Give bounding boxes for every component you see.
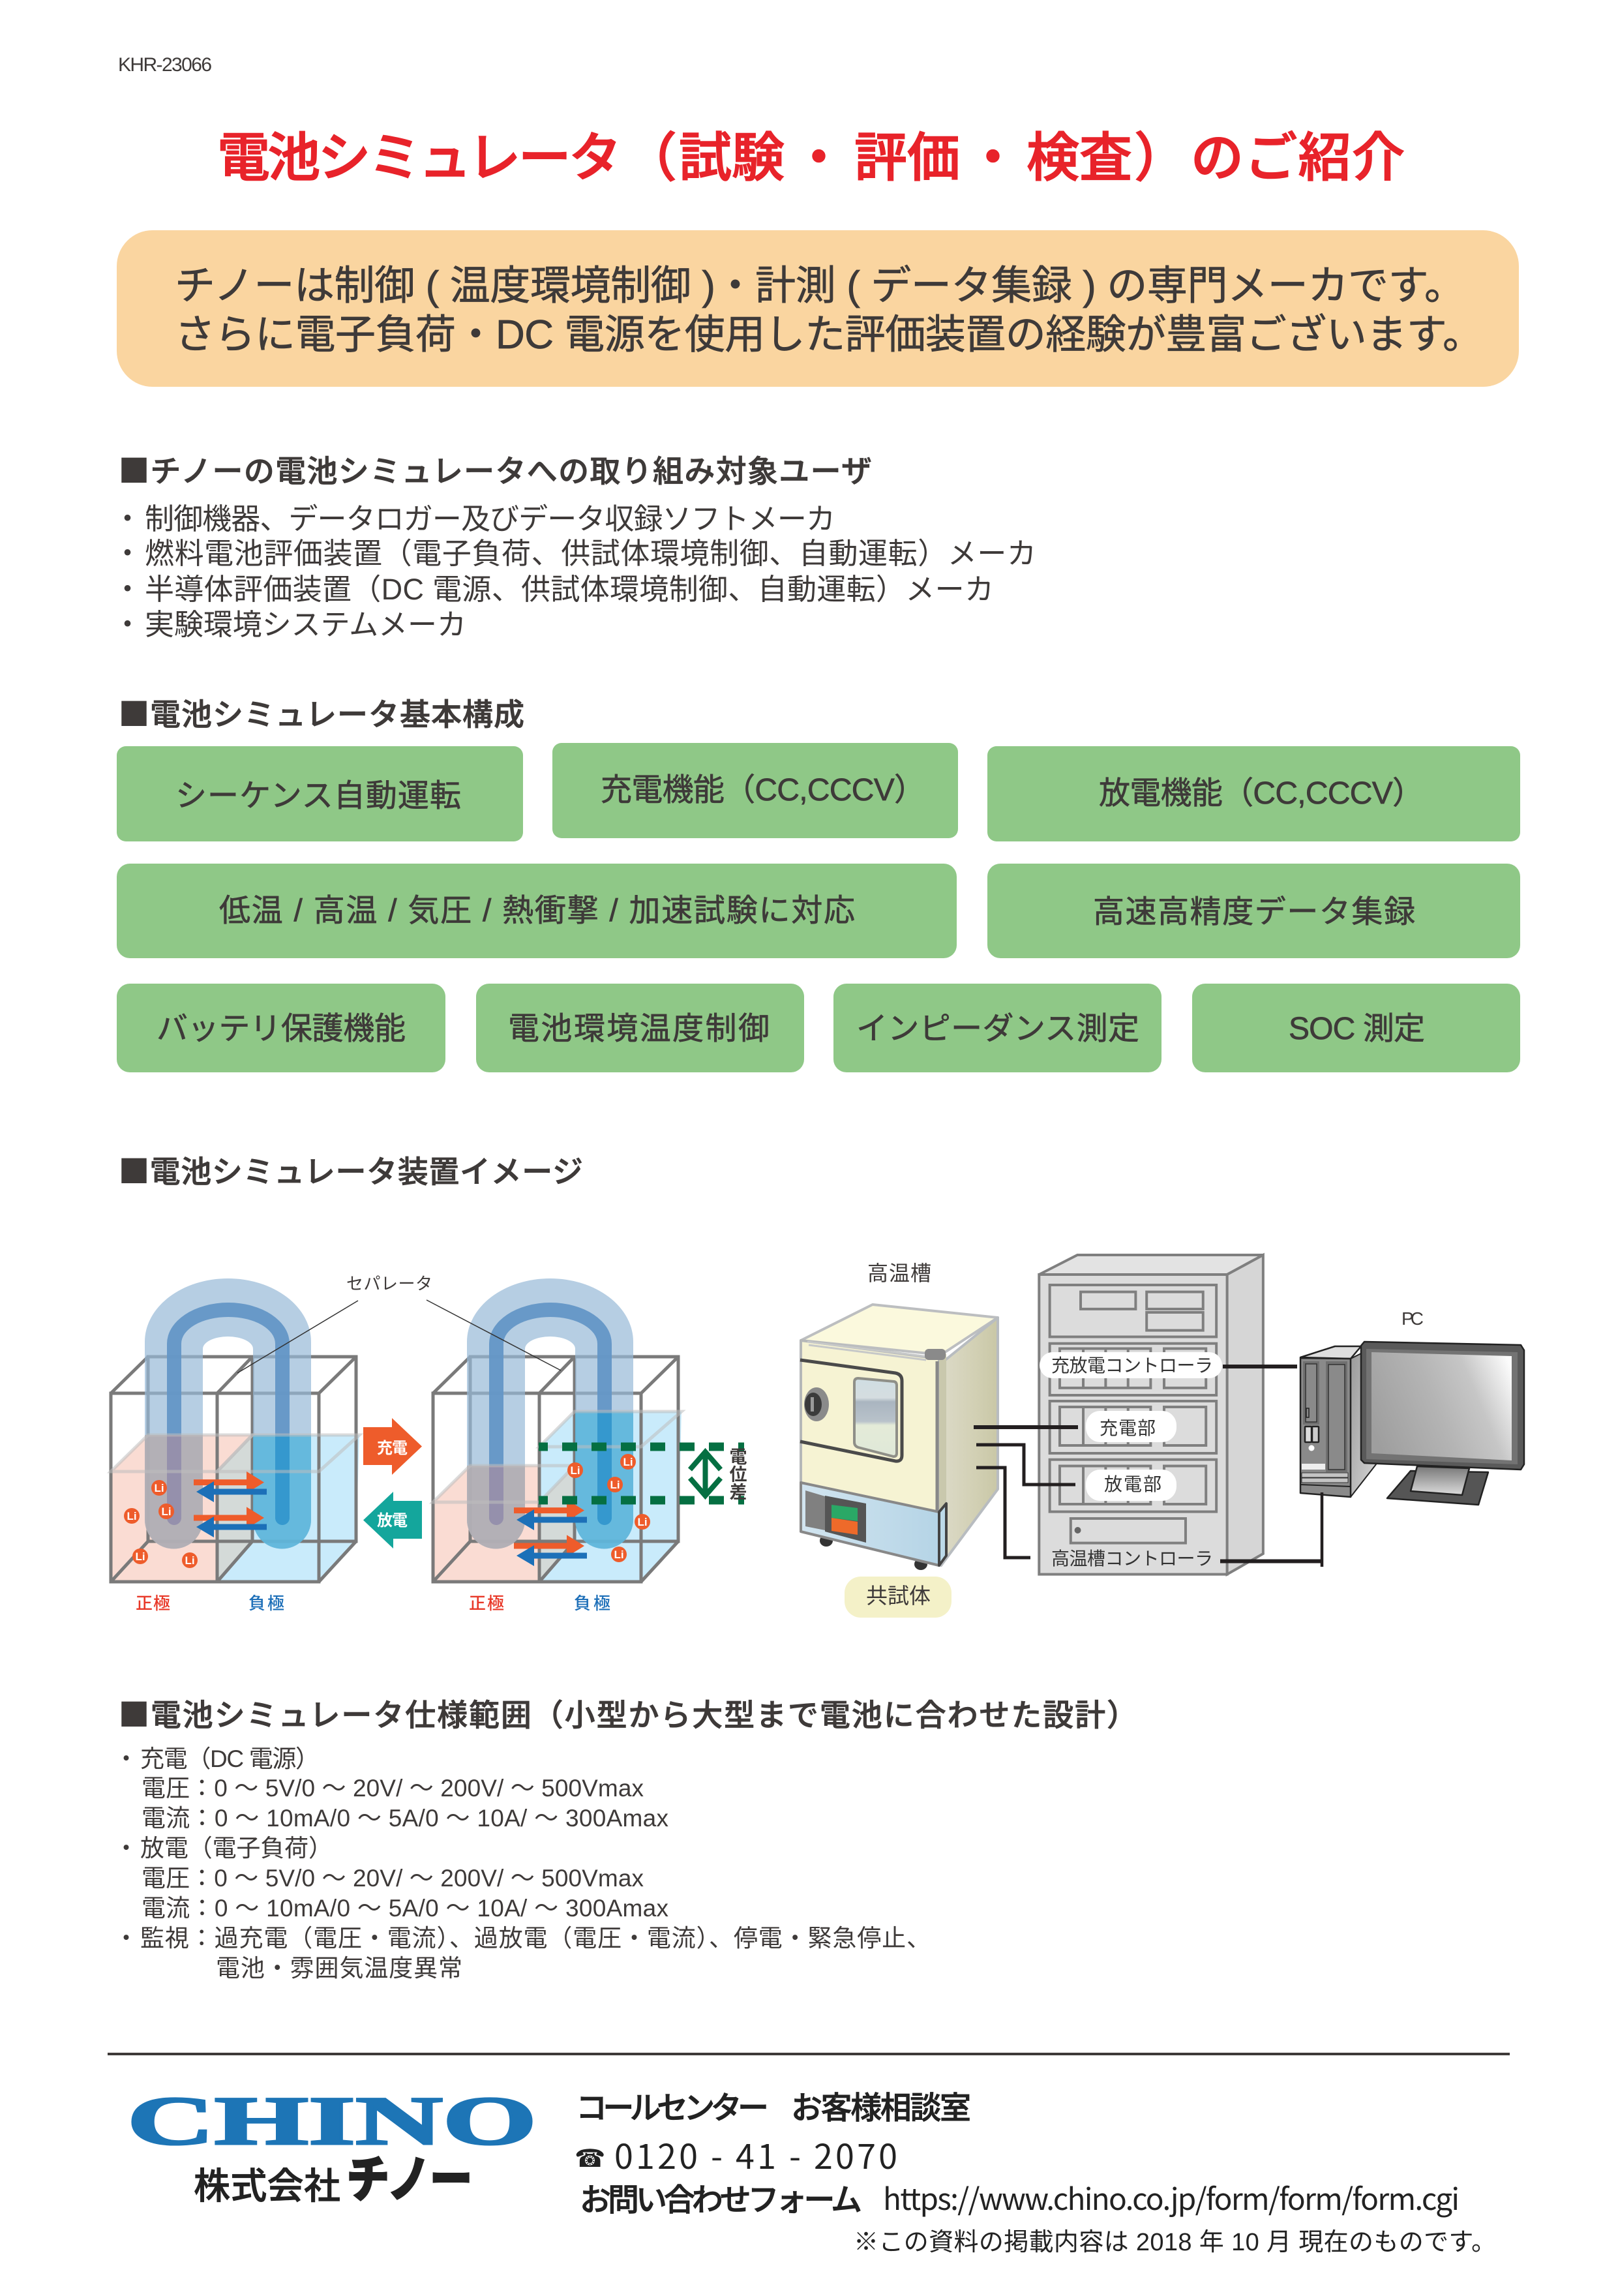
list: target users: ・ <box>113 537 142 570</box>
title: 電池シミュレータ <box>217 115 622 192</box>
potential difference marker <box>539 1447 747 1502</box>
diagram: battery after charge: Li <box>570 1464 580 1477</box>
illustration: monitor <box>1361 1342 1524 1505</box>
arrow: discharge: 放電 <box>377 1512 408 1530</box>
title: 評価 <box>854 115 960 192</box>
list: target users: ・ <box>113 573 142 606</box>
box: test conditions <box>117 864 957 958</box>
diagram: battery before charge: Li <box>161 1505 172 1518</box>
title: 試験 <box>679 115 785 192</box>
illustration: PC tower <box>1300 1346 1376 1497</box>
contact: call center <box>576 2091 971 2126</box>
list: specifications: 電流：0 ～ 10mA/0 ～ 5A/0 ～ 10A/ ～ 300Amax <box>142 1895 669 1922</box>
box: SOC measurement: SOC 測定 <box>1289 1012 1425 1046</box>
list: specifications: 電池・雰囲気温度異常 <box>216 1955 462 1982</box>
logo: CHINO <box>127 2083 537 2208</box>
diagram: battery after charge <box>433 1278 682 1582</box>
title: ・ <box>792 115 845 192</box>
box: sequence auto operation <box>117 746 523 841</box>
footer rule <box>108 2053 1510 2055</box>
heading: device image: ■電池シミュレータ装置イメージ <box>119 1147 583 1192</box>
diagram: battery before charge: Li <box>135 1550 145 1563</box>
diagram: battery before charge <box>111 1278 359 1582</box>
title: ） <box>1134 115 1187 192</box>
contact: call center: お客様相談室 <box>791 2091 971 2126</box>
list: target users: ・ <box>113 608 142 641</box>
label: discharging unit <box>1086 1470 1176 1501</box>
intro line 2: さらに電子負荷・DC 電源を使用した評価装置の経験が豊富ございます。 <box>175 312 1483 357</box>
label: positive electrode right: 正極 <box>469 1594 504 1613</box>
logo: company name katakana: チノー <box>347 2152 472 2208</box>
list: target users: 制御機器、データロガー及びデータ収録ソフトメーカ <box>145 502 835 536</box>
logo: company name: 株式会社 <box>194 2166 340 2207</box>
logo: CHINO: CHINO <box>127 2083 537 2159</box>
contact: form <box>580 2176 1460 2219</box>
label: negative electrode left: 負極 <box>248 1594 284 1613</box>
label: PC: PC <box>1401 1308 1424 1329</box>
contact: form: お問い合わせフォーム <box>580 2183 862 2218</box>
list: specifications: 電圧：0 ～ 5V/0 ～ 20V/ ～ 200V/ ～ 500Vmax <box>142 1775 644 1802</box>
diagram: battery after charge: Li <box>614 1548 624 1561</box>
label: positive electrode left: 正極 <box>136 1594 170 1613</box>
heading: basic configuration: ■電池シミュレータ基本構成 <box>119 689 524 734</box>
label: negative electrode right: 負極 <box>574 1594 610 1613</box>
illustration: chamber <box>800 1305 998 1570</box>
potential difference marker: 位 <box>729 1465 747 1485</box>
box: battery protection <box>117 984 445 1072</box>
list: specifications: 充電（DC 電源） <box>140 1745 320 1772</box>
diagram: battery after charge: Li <box>623 1456 633 1468</box>
arrow: charge <box>363 1418 422 1475</box>
box: high-speed data logging <box>987 864 1520 958</box>
list: specifications: 電圧：0 ～ 5V/0 ～ 20V/ ～ 200V/ ～ 500Vmax <box>142 1865 644 1892</box>
box: impedance measurement: インピーダンス測定 <box>856 1012 1139 1046</box>
list: specifications: ・ <box>114 1925 138 1952</box>
potential difference marker: 差 <box>729 1483 747 1502</box>
box: battery temperature control: 電池環境温度制御 <box>508 1012 770 1046</box>
diagram: battery before charge: Li <box>127 1510 137 1522</box>
document code: KHR-23066 <box>118 54 212 76</box>
footnote: ※この資料の掲載内容は 2018 年 10 月 現在のものです。 <box>854 2229 1496 2256</box>
label: test specimen: 共試体 <box>866 1584 931 1608</box>
list: specifications: ・ <box>114 1835 138 1862</box>
panel: basic configuration boxes <box>117 743 1520 1072</box>
arrow: discharge <box>363 1492 422 1548</box>
title: のご紹介 <box>1191 115 1405 192</box>
box: charge function <box>552 743 958 838</box>
list: target users <box>113 502 1036 641</box>
intro line 1: チノーは制御 ( 温度環境制御 )・計測 ( データ集録 ) の専門メーカです。 <box>175 264 1465 309</box>
title: 検査 <box>1026 115 1132 192</box>
box: battery temperature control <box>476 984 804 1072</box>
label: separator with leader lines <box>237 1274 561 1373</box>
list: target users: 実験環境システムメーカ <box>145 608 466 641</box>
label: charge-discharge controller <box>1040 1352 1222 1378</box>
list: target users: 半導体評価装置（DC 電源、供試体環境制御、自動運転）メーカ <box>145 573 994 606</box>
label: test specimen <box>845 1577 951 1618</box>
box: discharge function <box>987 746 1520 841</box>
list: specifications <box>114 1745 931 1982</box>
potential difference marker: 電 <box>729 1447 747 1467</box>
illustration: control rack <box>1039 1255 1263 1575</box>
list: specifications: ・ <box>114 1745 138 1772</box>
box: impedance measurement <box>833 984 1161 1072</box>
box: SOC measurement <box>1192 984 1520 1072</box>
title <box>217 115 1405 192</box>
label: charging unit <box>1086 1411 1176 1442</box>
box: test conditions: 低温 / 高温 / 気圧 / 熱衝撃 / 加速試験に対応 <box>219 894 855 928</box>
diagram: battery before charge: Li <box>154 1482 164 1494</box>
label: chamber controller: 高温槽コントローラ <box>1051 1548 1213 1569</box>
contact: call center: コールセンター <box>576 2091 769 2126</box>
list: target users: ・ <box>113 502 142 536</box>
list: specifications: 放電（電子負荷） <box>140 1835 333 1862</box>
box: charge function: 充電機能（CC,CCCV） <box>601 773 925 808</box>
diagram: battery before charge: Li <box>185 1554 195 1567</box>
diagram: battery after charge: Li <box>637 1516 648 1528</box>
connection lines <box>974 1367 1323 1567</box>
label: charge-discharge controller: 充放電コントローラ <box>1051 1355 1213 1376</box>
label: discharging unit: 放電部 <box>1104 1474 1161 1494</box>
arrow: charge: 充電 <box>377 1440 408 1457</box>
diagram: battery after charge: Li <box>610 1479 620 1491</box>
panel: intro callout <box>117 230 1519 387</box>
contact: phone: 0120 - 41 - 2070 <box>614 2130 897 2179</box>
label: high temperature chamber: 高温槽 <box>867 1261 931 1285</box>
list: target users: 燃料電池評価装置（電子負荷、供試体環境制御、自動運転）メーカ <box>145 537 1036 570</box>
contact: phone: ☎ <box>575 2144 605 2173</box>
heading: target users: ■チノーの電池シミュレータへの取り組み対象ユーザ <box>119 446 872 491</box>
list: specifications: 電流：0 ～ 10mA/0 ～ 5A/0 ～ 10A/ ～ 300Amax <box>142 1805 669 1832</box>
label: charging unit: 充電部 <box>1100 1418 1156 1438</box>
box: battery protection: バッテリ保護機能 <box>157 1012 406 1046</box>
title: ・ <box>966 115 1019 192</box>
box: high-speed data logging: 高速高精度データ集録 <box>1093 895 1415 929</box>
list: specifications: 監視：過充電（電圧・電流）、過放電（電圧・電流）、停電・緊急停止、 <box>140 1925 931 1952</box>
box: discharge function: 放電機能（CC,CCCV） <box>1099 776 1424 811</box>
label: separator with leader lines: セパレータ <box>346 1274 432 1293</box>
box: sequence auto operation: シーケンス自動運転 <box>175 779 461 813</box>
contact: form: https://www.chino.co.jp/form/form/form.cgi <box>883 2176 1460 2219</box>
heading: specification range: ■電池シミュレータ仕様範囲（小型から大型まで電池に合わせた設計） <box>119 1690 1137 1735</box>
title: （ <box>624 115 677 192</box>
